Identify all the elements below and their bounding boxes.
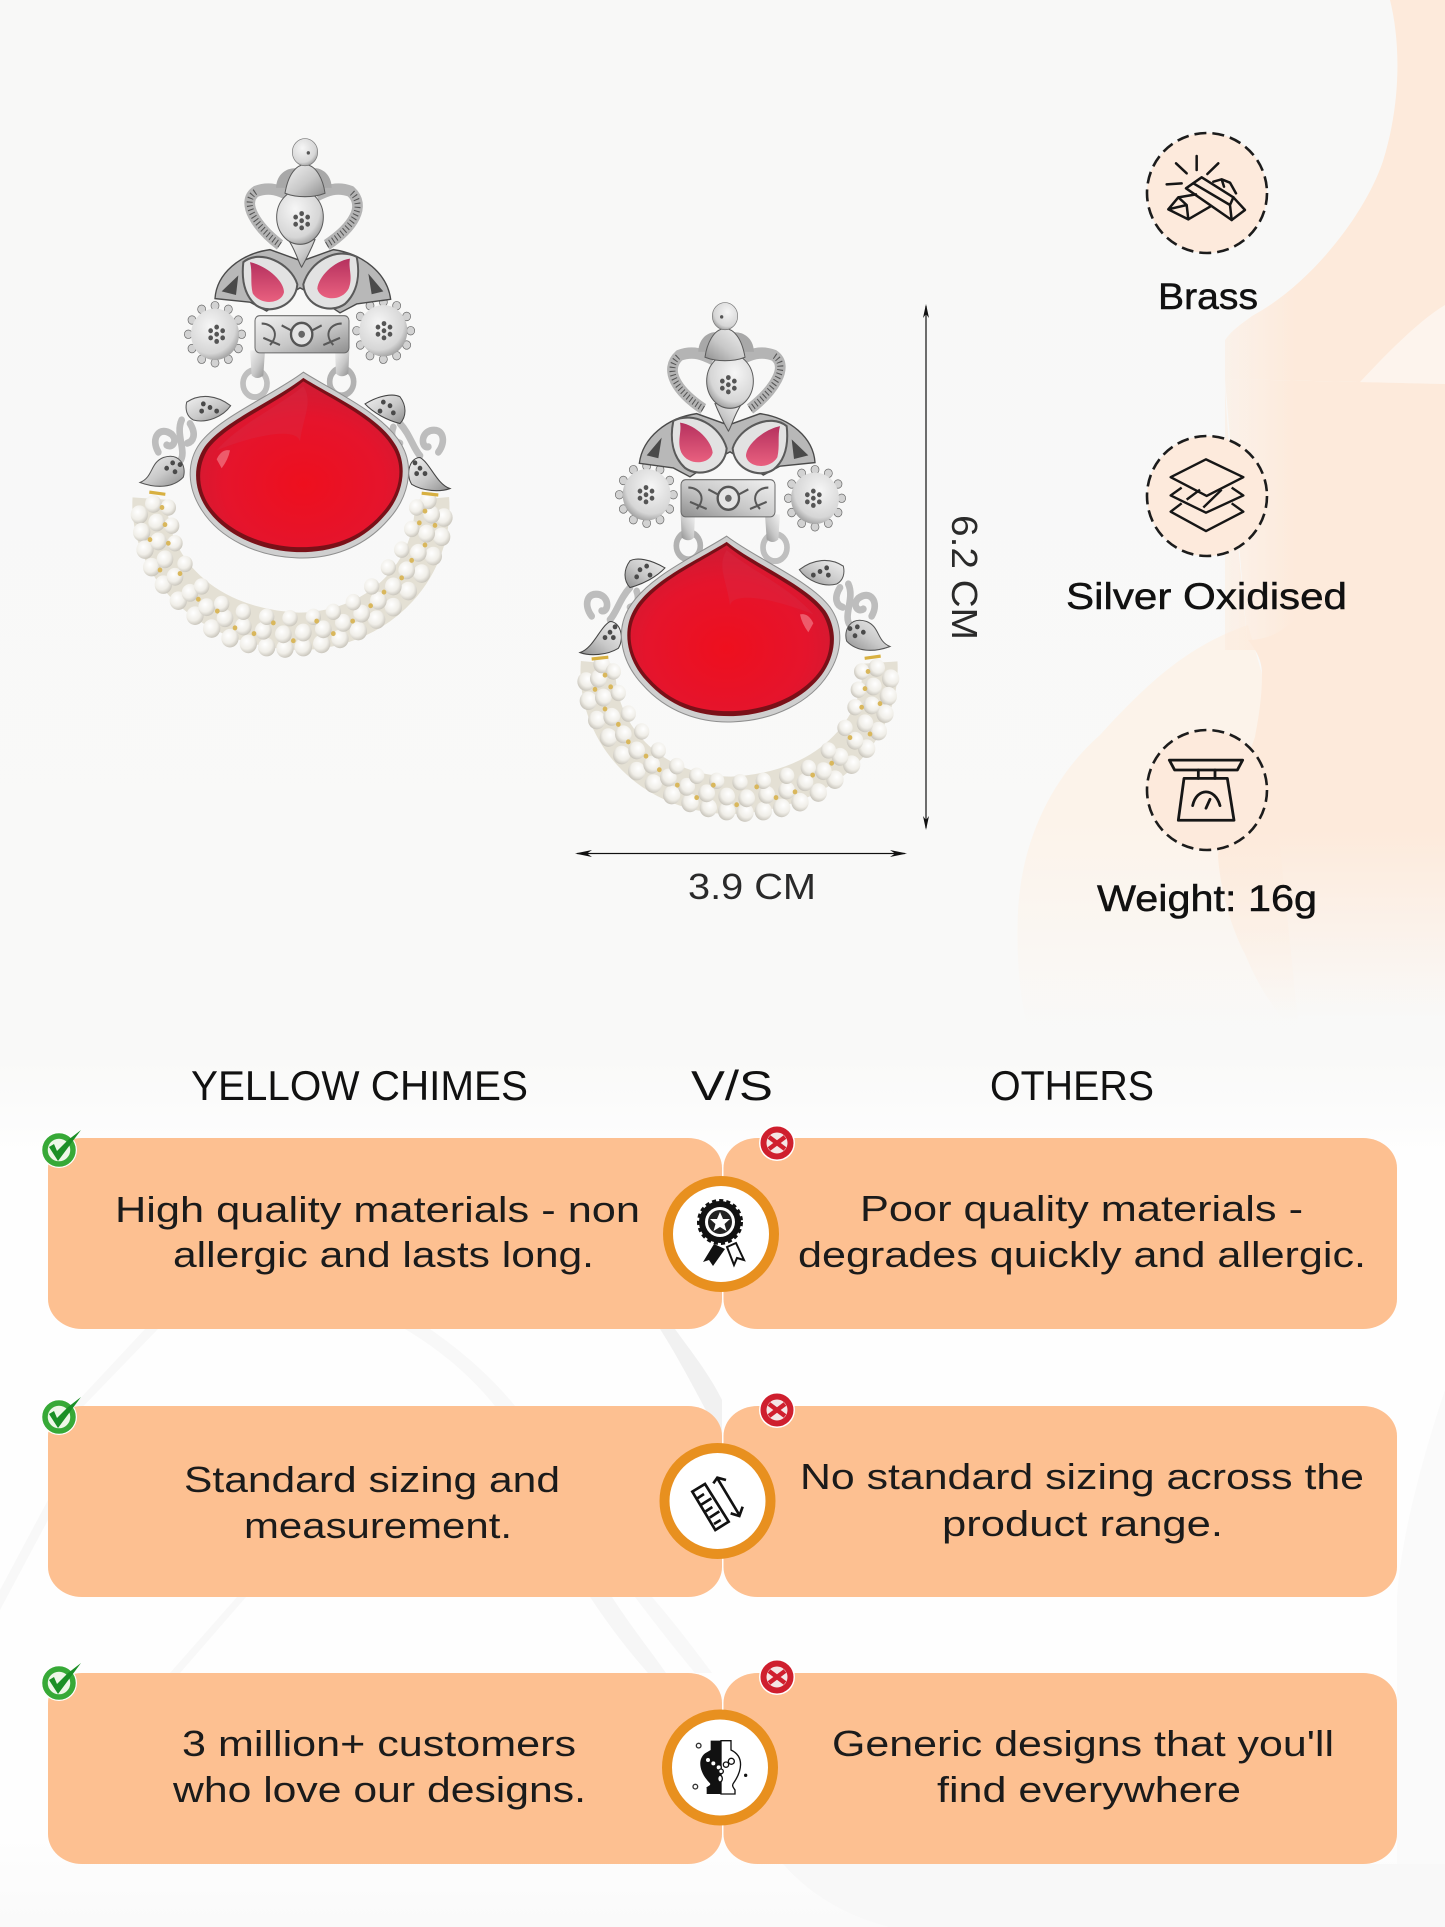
dimension arrow: height (923, 304, 929, 830)
heading: V/S: V/S (691, 1062, 773, 1109)
icon: cross badge (759, 1392, 795, 1428)
panel: others designs (724, 1673, 1397, 1864)
text: customers: 3 million+ customers (182, 1723, 576, 1764)
panel: yellow chimes quality (48, 1138, 722, 1329)
text: no standard sizing: product range. (942, 1503, 1223, 1544)
label: Silver Oxidised: Silver Oxidised (1066, 576, 1347, 617)
icon: brass bars (1147, 133, 1267, 253)
icon: layers (1147, 436, 1267, 556)
text: poor quality: degrades quickly and allergic. (798, 1234, 1366, 1275)
pearl chain (131, 491, 453, 658)
text: no standard sizing: No standard sizing across the (800, 1456, 1364, 1497)
red gemstone (190, 372, 409, 558)
heading: OTHERS: OTHERS (990, 1062, 1154, 1109)
text: customers: who love our designs. (172, 1769, 586, 1810)
comparison row 2 (41, 1392, 1397, 1597)
icon: check badge (41, 1397, 81, 1435)
earring: right, with dimensions (577, 303, 899, 822)
panel: others sizing (724, 1406, 1397, 1597)
hoops and pins (243, 350, 354, 397)
label: Weight: 16g: Weight: 16g (1097, 878, 1317, 919)
text: poor quality: Poor quality materials - (860, 1188, 1303, 1229)
side filigree (140, 395, 450, 491)
medallions (184, 298, 415, 367)
barrel bar (255, 316, 349, 353)
text: high quality: High quality materials - non (115, 1189, 640, 1230)
text: high quality: allergic and lasts long. (173, 1234, 594, 1275)
icon: check badge (41, 1130, 81, 1168)
crest wings with pink stones (215, 250, 391, 313)
icon: ruler in ring (664, 1448, 770, 1554)
text: customers (172, 1723, 586, 1810)
label: Brass: Brass (1158, 276, 1258, 317)
text: generic designs: find everywhere (937, 1769, 1241, 1810)
icon: cross badge (759, 1125, 795, 1161)
panel: others quality (724, 1138, 1397, 1329)
text: no standard sizing (800, 1456, 1364, 1544)
text: generic designs: Generic designs that you'll (832, 1723, 1334, 1764)
icon: necklace bust in ring (667, 1714, 773, 1820)
label: 6.2 CM: 6.2 CM (944, 515, 985, 640)
panel: yellow chimes sizing (48, 1406, 722, 1597)
text: poor quality (798, 1188, 1366, 1275)
heading: YELLOW CHIMES: YELLOW CHIMES (191, 1062, 528, 1109)
text: high quality (115, 1189, 640, 1275)
icon: weighing scale (1147, 730, 1267, 850)
earring: left (131, 139, 453, 658)
text: generic designs (832, 1723, 1334, 1810)
text: standard sizing: Standard sizing and (184, 1459, 560, 1500)
label: 3.9 CM: 3.9 CM (688, 866, 816, 907)
text: standard sizing: measurement. (244, 1505, 512, 1546)
text: standard sizing (184, 1459, 560, 1546)
panel: yellow chimes customers (48, 1673, 722, 1864)
comparison row 1 (41, 1125, 1397, 1329)
crown (250, 139, 358, 267)
icon: rosette in ring (668, 1181, 774, 1287)
icon: cross badge (759, 1659, 795, 1695)
dimension arrow: width (575, 850, 907, 857)
comparison row 3 (41, 1659, 1397, 1864)
icon: check badge (41, 1663, 81, 1701)
